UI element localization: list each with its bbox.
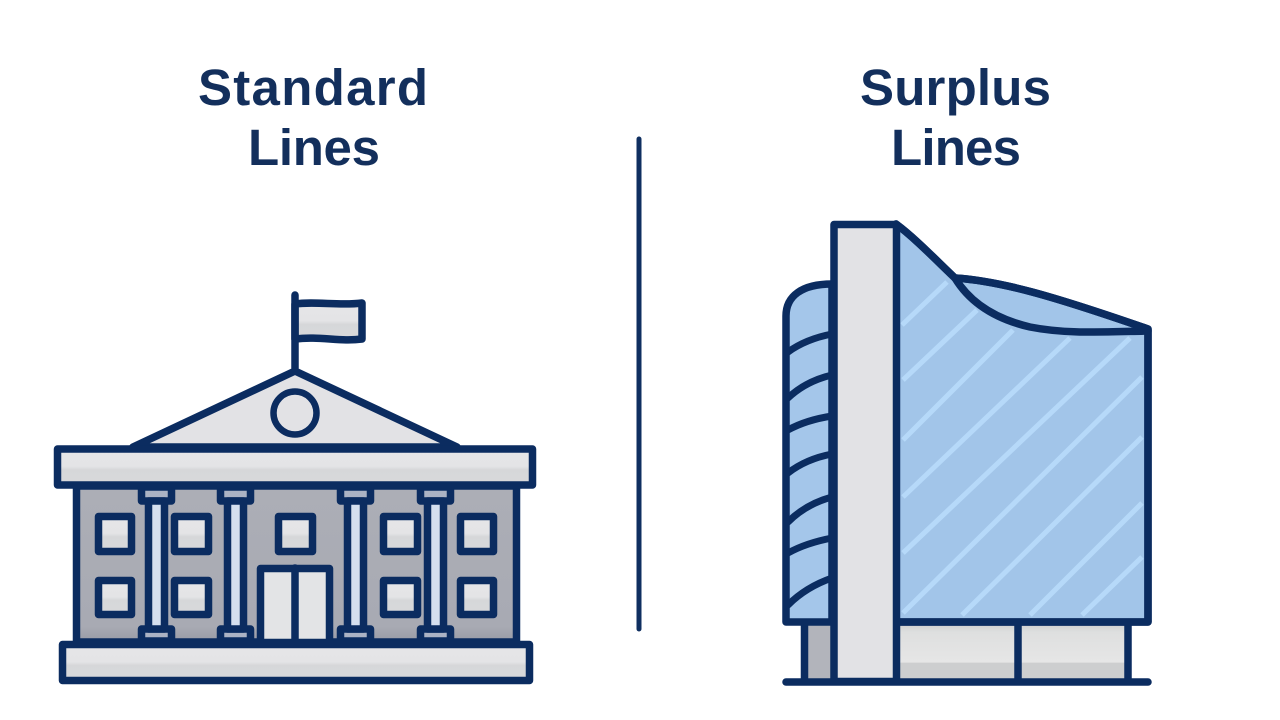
windows lower row: [98, 580, 494, 614]
double door: [260, 568, 330, 642]
vertical tower column: [834, 224, 896, 682]
base plinth: [62, 644, 530, 680]
central divider line: [636, 139, 642, 629]
heading: Surplus Lines: [860, 59, 1051, 176]
icon: modern glass tower, surplus lines: [786, 224, 1148, 682]
heading: Standard Lines: Standard: [198, 59, 428, 116]
columns: [142, 487, 450, 641]
heading: Surplus Lines: Surplus: [860, 59, 1051, 116]
entablature: [58, 449, 532, 485]
facade wall: [76, 486, 516, 642]
flag on pole: [295, 295, 362, 368]
heading: Surplus Lines: Lines: [891, 119, 1021, 176]
ground line: [786, 678, 1148, 686]
windows upper row: [98, 516, 494, 552]
lower storefront: [804, 624, 1128, 680]
left curved wing: [786, 284, 832, 622]
icon: government building, standard lines: [58, 295, 532, 680]
heading: Standard Lines: [198, 59, 428, 176]
heading: Standard Lines: Lines: [248, 119, 380, 176]
main glass facade: [896, 224, 1148, 622]
pediment with circle: [133, 371, 457, 447]
